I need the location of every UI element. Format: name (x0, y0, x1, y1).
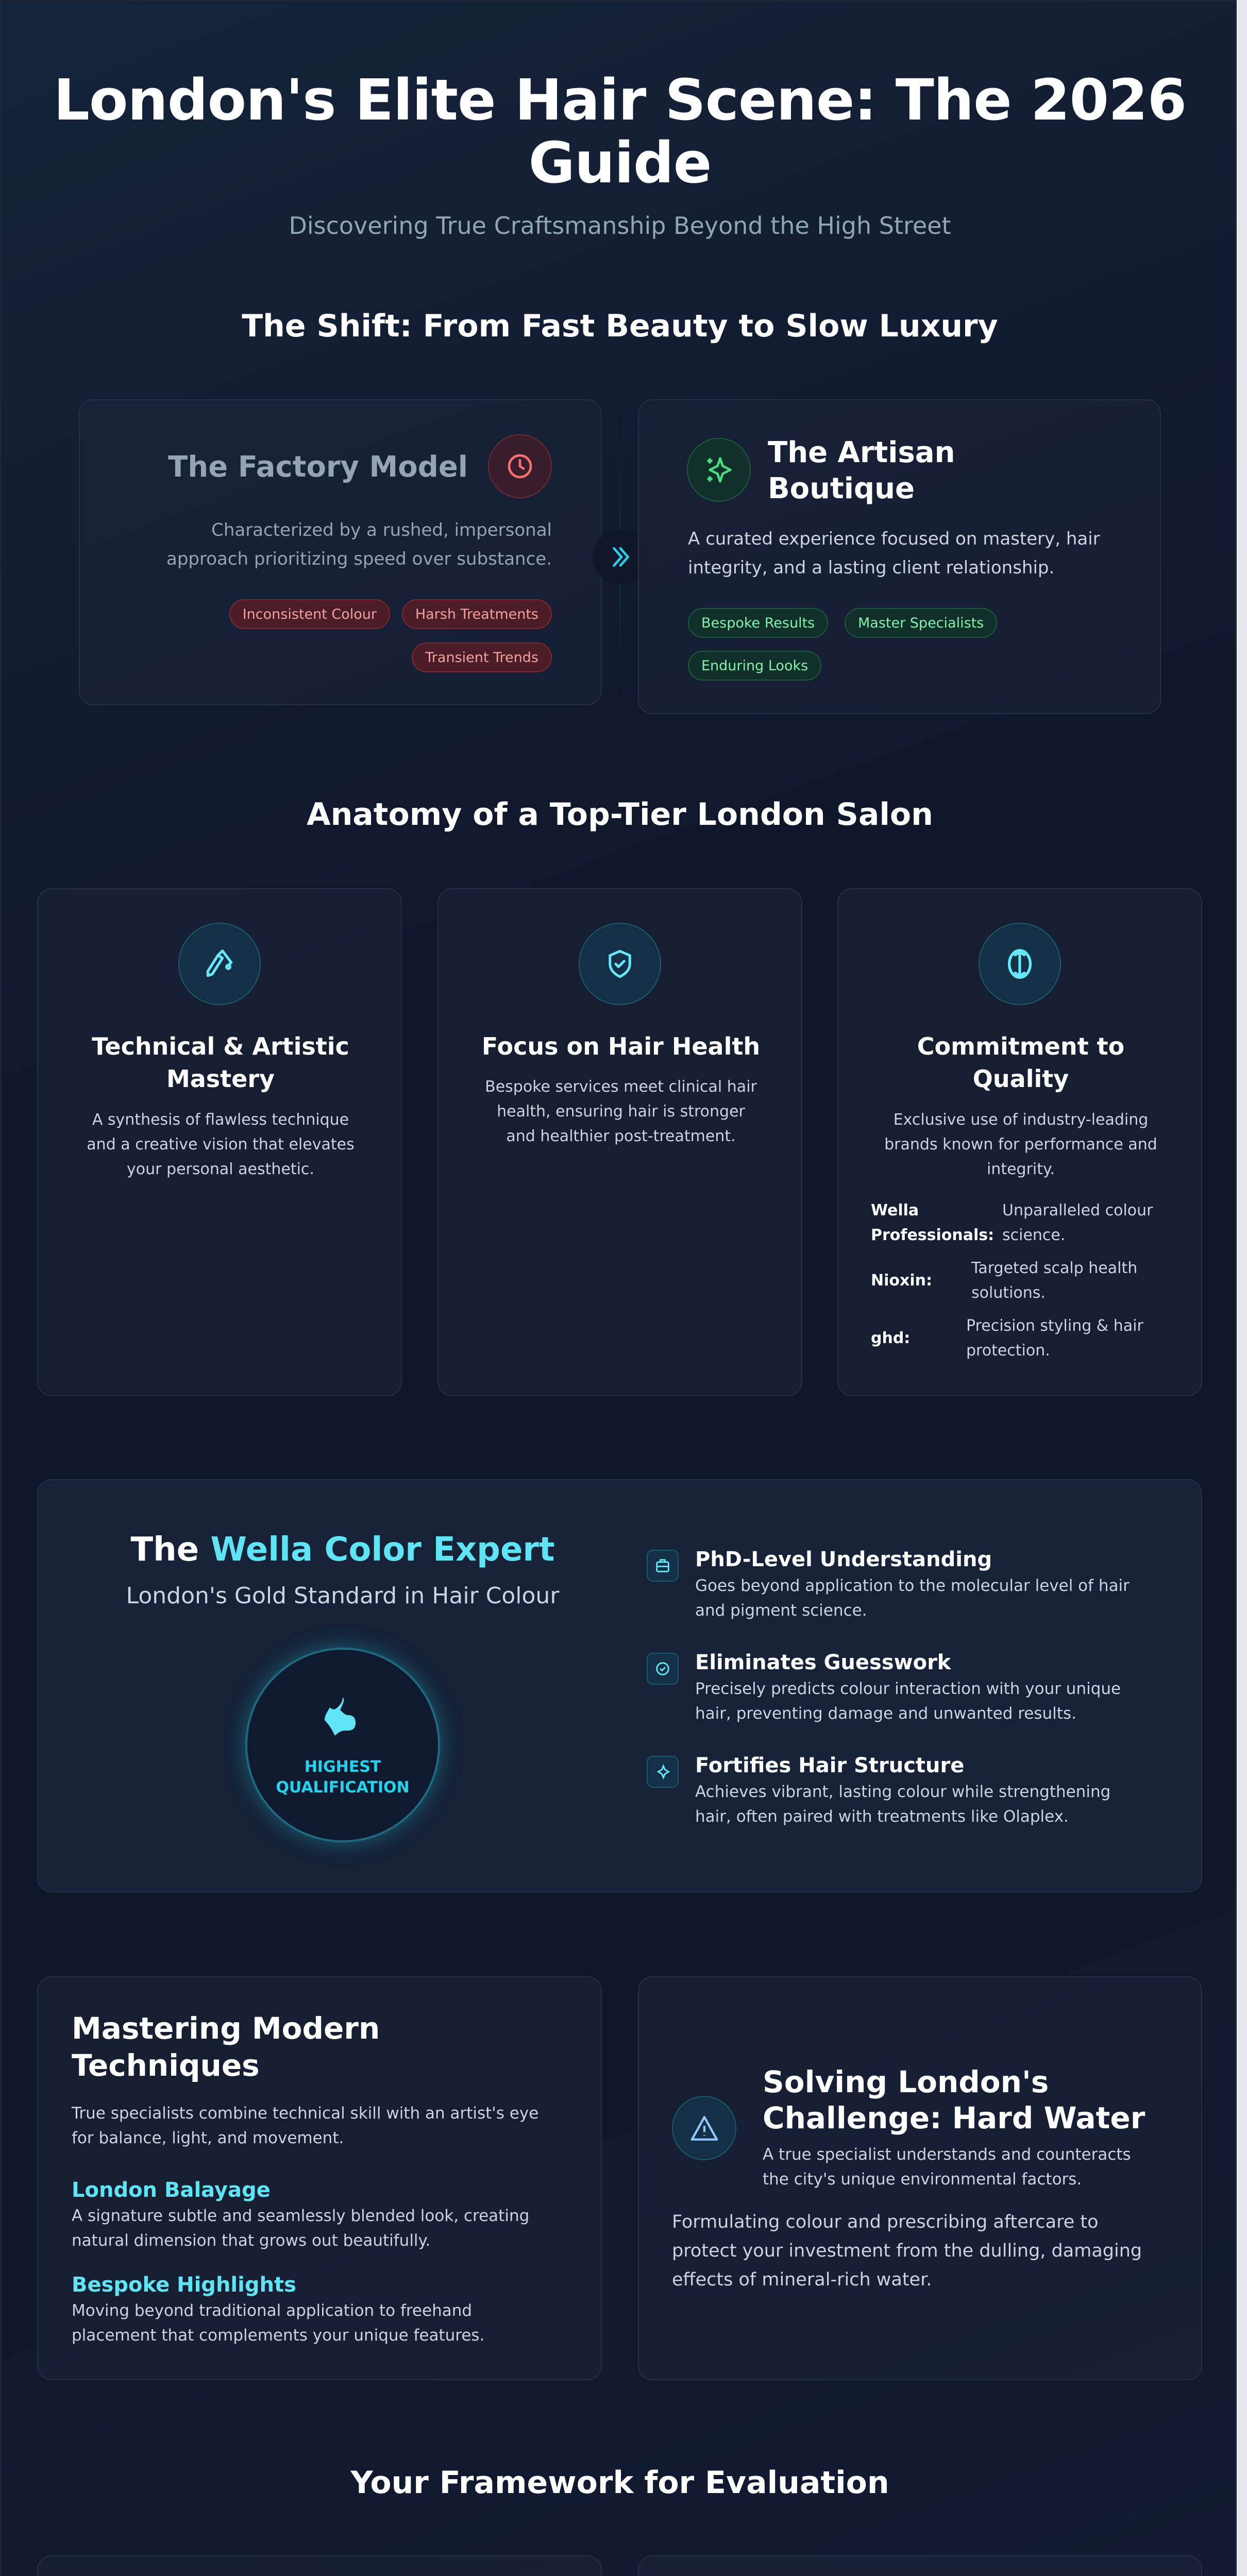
tags: negatives: Harsh Treatments (415, 606, 538, 622)
title (92, 1032, 349, 1093)
icon: kit (647, 1550, 679, 1582)
artisan title: Boutique (768, 472, 915, 505)
title: Techniques (72, 2048, 260, 2083)
icon: check (647, 1653, 679, 1685)
intro: for balance, light, and movement. (72, 2129, 344, 2147)
description: Exclusive use of industry-leading (894, 1111, 1148, 1129)
panel: modern techniques: Moving beyond traditional application to freehand (72, 2301, 472, 2320)
icon: warning (672, 2096, 736, 2160)
tags: positives: Bespoke Results (701, 615, 815, 631)
item: fortifies (647, 1754, 1110, 1826)
description: your personal aesthetic. (127, 1160, 314, 1178)
title: Challenge: Hard Water (763, 2100, 1145, 2136)
title (763, 2064, 1145, 2136)
description: A synthesis of flawless technique (92, 1111, 349, 1129)
artisan description: integrity, and a lasting client relationship. (688, 557, 1054, 578)
tags: negatives: Inconsistent Colour (243, 606, 377, 622)
title (72, 2011, 380, 2083)
description: Bespoke services meet clinical hair (485, 1078, 757, 1096)
heading: the shift: The Shift: From Fast Beauty to Slow Luxury (242, 308, 998, 344)
title: Quality (973, 1065, 1069, 1093)
tags: positives: Enduring Looks (701, 658, 808, 674)
technique: highlights: Bespoke Highlights (72, 2273, 296, 2297)
factory description: approach prioritizing speed over substance. (166, 549, 552, 569)
description: and a creative vision that elevates (87, 1136, 355, 1154)
panel: modern techniques (37, 1976, 602, 2380)
technique: balayage: London Balayage (72, 2178, 271, 2202)
brand list: science. (1002, 1226, 1065, 1244)
panel: quality (837, 888, 1202, 1396)
intro: True specialists combine technical skill with an artist's eye (72, 2104, 538, 2123)
brand list: Nioxin: (871, 1272, 932, 1290)
panel: consultation (638, 2555, 1202, 2576)
brand list: Unparalleled colour (1002, 1201, 1153, 1219)
title: Solving London's (763, 2064, 1049, 2099)
body: Formulating colour and prescribing aftercare to (672, 2212, 1099, 2232)
item: guesswork (647, 1651, 1121, 1723)
artisan title: The Artisan (768, 436, 955, 469)
item: guesswork: Precisely predicts colour interaction with your unique (695, 1680, 1121, 1698)
tags: negatives: Transient Trends (425, 650, 538, 666)
panel: conscious shift (37, 2555, 602, 2576)
tags: negatives (229, 599, 552, 672)
badge: highest qualification: QUALIFICATION (276, 1778, 410, 1797)
item: guesswork: Eliminates Guesswork (695, 1651, 951, 1674)
wella title: The Wella Color Expert (130, 1531, 555, 1569)
description: brands known for performance and (884, 1136, 1157, 1154)
badge: highest qualification: HIGHEST (305, 1758, 381, 1776)
brand list: Targeted scalp health (971, 1259, 1137, 1277)
subtext: A true specialist understands and counteracts (763, 2145, 1131, 2164)
item: fortifies: Achieves vibrant, lasting colour while strengthening (695, 1783, 1110, 1801)
panel: hard water (638, 1976, 1202, 2380)
title: Mastering Modern (72, 2011, 380, 2046)
body (672, 2208, 1142, 2294)
panel: modern techniques: A signature subtle and seamlessly blended look, creating (72, 2207, 529, 2225)
title: Focus on Hair Health (482, 1032, 760, 1060)
artisan description (688, 529, 1100, 578)
tags: positives: Master Specialists (858, 615, 984, 631)
brand list: Precision styling & hair (966, 1317, 1143, 1335)
panel: artisan boutique (638, 399, 1161, 714)
description: integrity. (987, 1160, 1055, 1178)
body: effects of mineral-rich water. (672, 2269, 932, 2290)
tags: positives (688, 608, 997, 681)
brand list: solutions. (971, 1284, 1046, 1302)
item: phd: PhD-Level Understanding (695, 1548, 992, 1571)
wella subtitle: London's Gold Standard in Hair Colour (126, 1583, 559, 1609)
item: fortifies: hair, often paired with treatments like Olaplex. (695, 1807, 1069, 1826)
panel: wella color expert (37, 1479, 1202, 1892)
panel: modern techniques: natural dimension that grows out beautifully. (72, 2231, 430, 2250)
divider line between cards (619, 414, 621, 702)
item: fortifies: Fortifies Hair Structure (695, 1754, 964, 1777)
subtext (763, 2142, 1131, 2192)
item: phd: and pigment science. (695, 1601, 867, 1620)
item: guesswork: hair, preventing damage and unwanted results. (695, 1704, 1076, 1723)
item: phd (647, 1548, 1130, 1620)
panel: factory model (79, 399, 602, 705)
body: protect your investment from the dulling, damaging (672, 2241, 1142, 2261)
icon: shield (579, 923, 661, 1005)
title: Commitment to (917, 1032, 1124, 1060)
subtitle: Discovering True Craftsmanship Beyond the High Street (289, 212, 951, 240)
description: health, ensuring hair is stronger (497, 1103, 745, 1121)
arrow: chevron (593, 529, 648, 585)
artisan title (768, 436, 955, 505)
icon: sparkle (687, 438, 751, 502)
factory description: Characterized by a rushed, impersonal (211, 520, 552, 540)
intro (72, 2101, 538, 2150)
icon: sparkle (647, 1756, 679, 1788)
icon: clock (488, 434, 552, 498)
description (884, 1111, 1157, 1178)
description: and healthier post-treatment. (506, 1127, 736, 1145)
brand list: Professionals: (871, 1226, 994, 1244)
factory description (166, 520, 552, 569)
brand list (871, 1201, 1153, 1360)
heading: framework: Your Framework for Evaluation (350, 2465, 889, 2501)
panel: technical mastery (37, 888, 402, 1396)
item: phd: Goes beyond application to the molecular level of hair (695, 1577, 1130, 1595)
title: Technical & Artistic (92, 1032, 349, 1060)
description (485, 1078, 757, 1145)
panel: modern techniques: placement that complements your unique features. (72, 2326, 484, 2345)
description (87, 1111, 355, 1178)
brand list: Wella (871, 1201, 919, 1219)
title: Mastery (166, 1065, 275, 1093)
title: Guide (529, 130, 711, 196)
title (54, 67, 1186, 196)
panel: hair health (437, 888, 802, 1396)
subtext: the city's unique environmental factors. (763, 2170, 1082, 2189)
heading: anatomy: Anatomy of a Top-Tier London Salon (307, 796, 933, 833)
badge: highest qualification (245, 1648, 440, 1842)
title (917, 1032, 1124, 1093)
factory title: The Factory Model (168, 450, 468, 484)
title: London's Elite Hair Scene: The 2026 (54, 67, 1186, 133)
icon: pen (178, 923, 261, 1005)
brand list: protection. (966, 1342, 1050, 1360)
icon: bottle (979, 923, 1061, 1005)
artisan description: A curated experience focused on mastery, hair (688, 529, 1100, 549)
brand list: ghd: (871, 1329, 910, 1347)
